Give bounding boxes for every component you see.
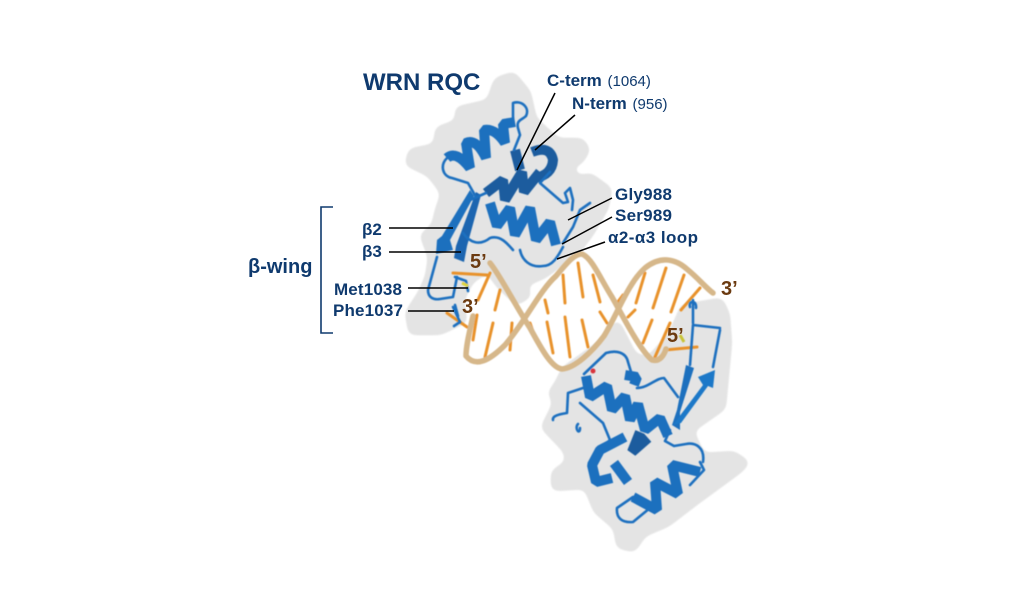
helix: bottom — [633, 465, 700, 510]
helix: upper — [586, 376, 668, 436]
label: α2-α3 loop: α2-α3 loop — [608, 228, 698, 247]
DNA duplex — [447, 254, 713, 369]
label: Gly988: Gly988 — [615, 185, 672, 204]
helix: upper ring — [515, 150, 553, 178]
red oxygen atom — [590, 368, 596, 374]
label: 5 prime lower: 5’ — [667, 325, 684, 347]
yellow sulfur — [462, 283, 468, 286]
beta strand: β3 — [454, 192, 481, 262]
beta strand: β2 — [436, 190, 474, 254]
helix: central — [486, 172, 540, 200]
label: 5 prime top: 5’ — [470, 251, 487, 273]
beta strand: arrow two — [673, 370, 715, 425]
DNA base pairs — [447, 263, 700, 357]
beta strand: arrow one — [672, 365, 694, 430]
label: Ser989: Ser989 — [615, 206, 672, 225]
protein ribbon: bottom domain — [553, 300, 720, 522]
label: Phe1037: Phe1037 — [333, 301, 403, 320]
helix: lower — [490, 203, 556, 245]
leader lines — [389, 93, 612, 311]
title: WRN RQC — [363, 69, 480, 96]
surface: top protein — [409, 76, 608, 331]
helix: lower dark — [632, 432, 648, 452]
sticks: yellow residue — [680, 335, 684, 342]
label: Met1038: Met1038 — [334, 280, 402, 299]
label: β-wing: β-wing — [248, 256, 312, 278]
loops: top domain — [428, 102, 590, 326]
protein ribbon: top domain — [428, 102, 590, 326]
label: N-term: N-term (956) — [572, 94, 668, 113]
sticks: Met1038 and Phe1037 — [455, 277, 468, 316]
helix: far left — [592, 437, 628, 482]
helix: top — [447, 122, 515, 168]
loops: bottom domain — [553, 300, 720, 522]
bracket: β-wing — [321, 207, 333, 333]
surface: bottom protein — [545, 302, 745, 548]
label: β2: β2 — [362, 220, 382, 239]
label: C-term: C-term (1064) — [547, 71, 651, 90]
label: β3: β3 — [362, 242, 382, 261]
DNA strand 1 — [466, 254, 666, 362]
label: 3 prime right: 3’ — [721, 278, 738, 300]
DNA strand 2 — [490, 260, 713, 369]
label: 3 prime left: 3’ — [462, 296, 479, 318]
helix: short top — [625, 375, 637, 385]
